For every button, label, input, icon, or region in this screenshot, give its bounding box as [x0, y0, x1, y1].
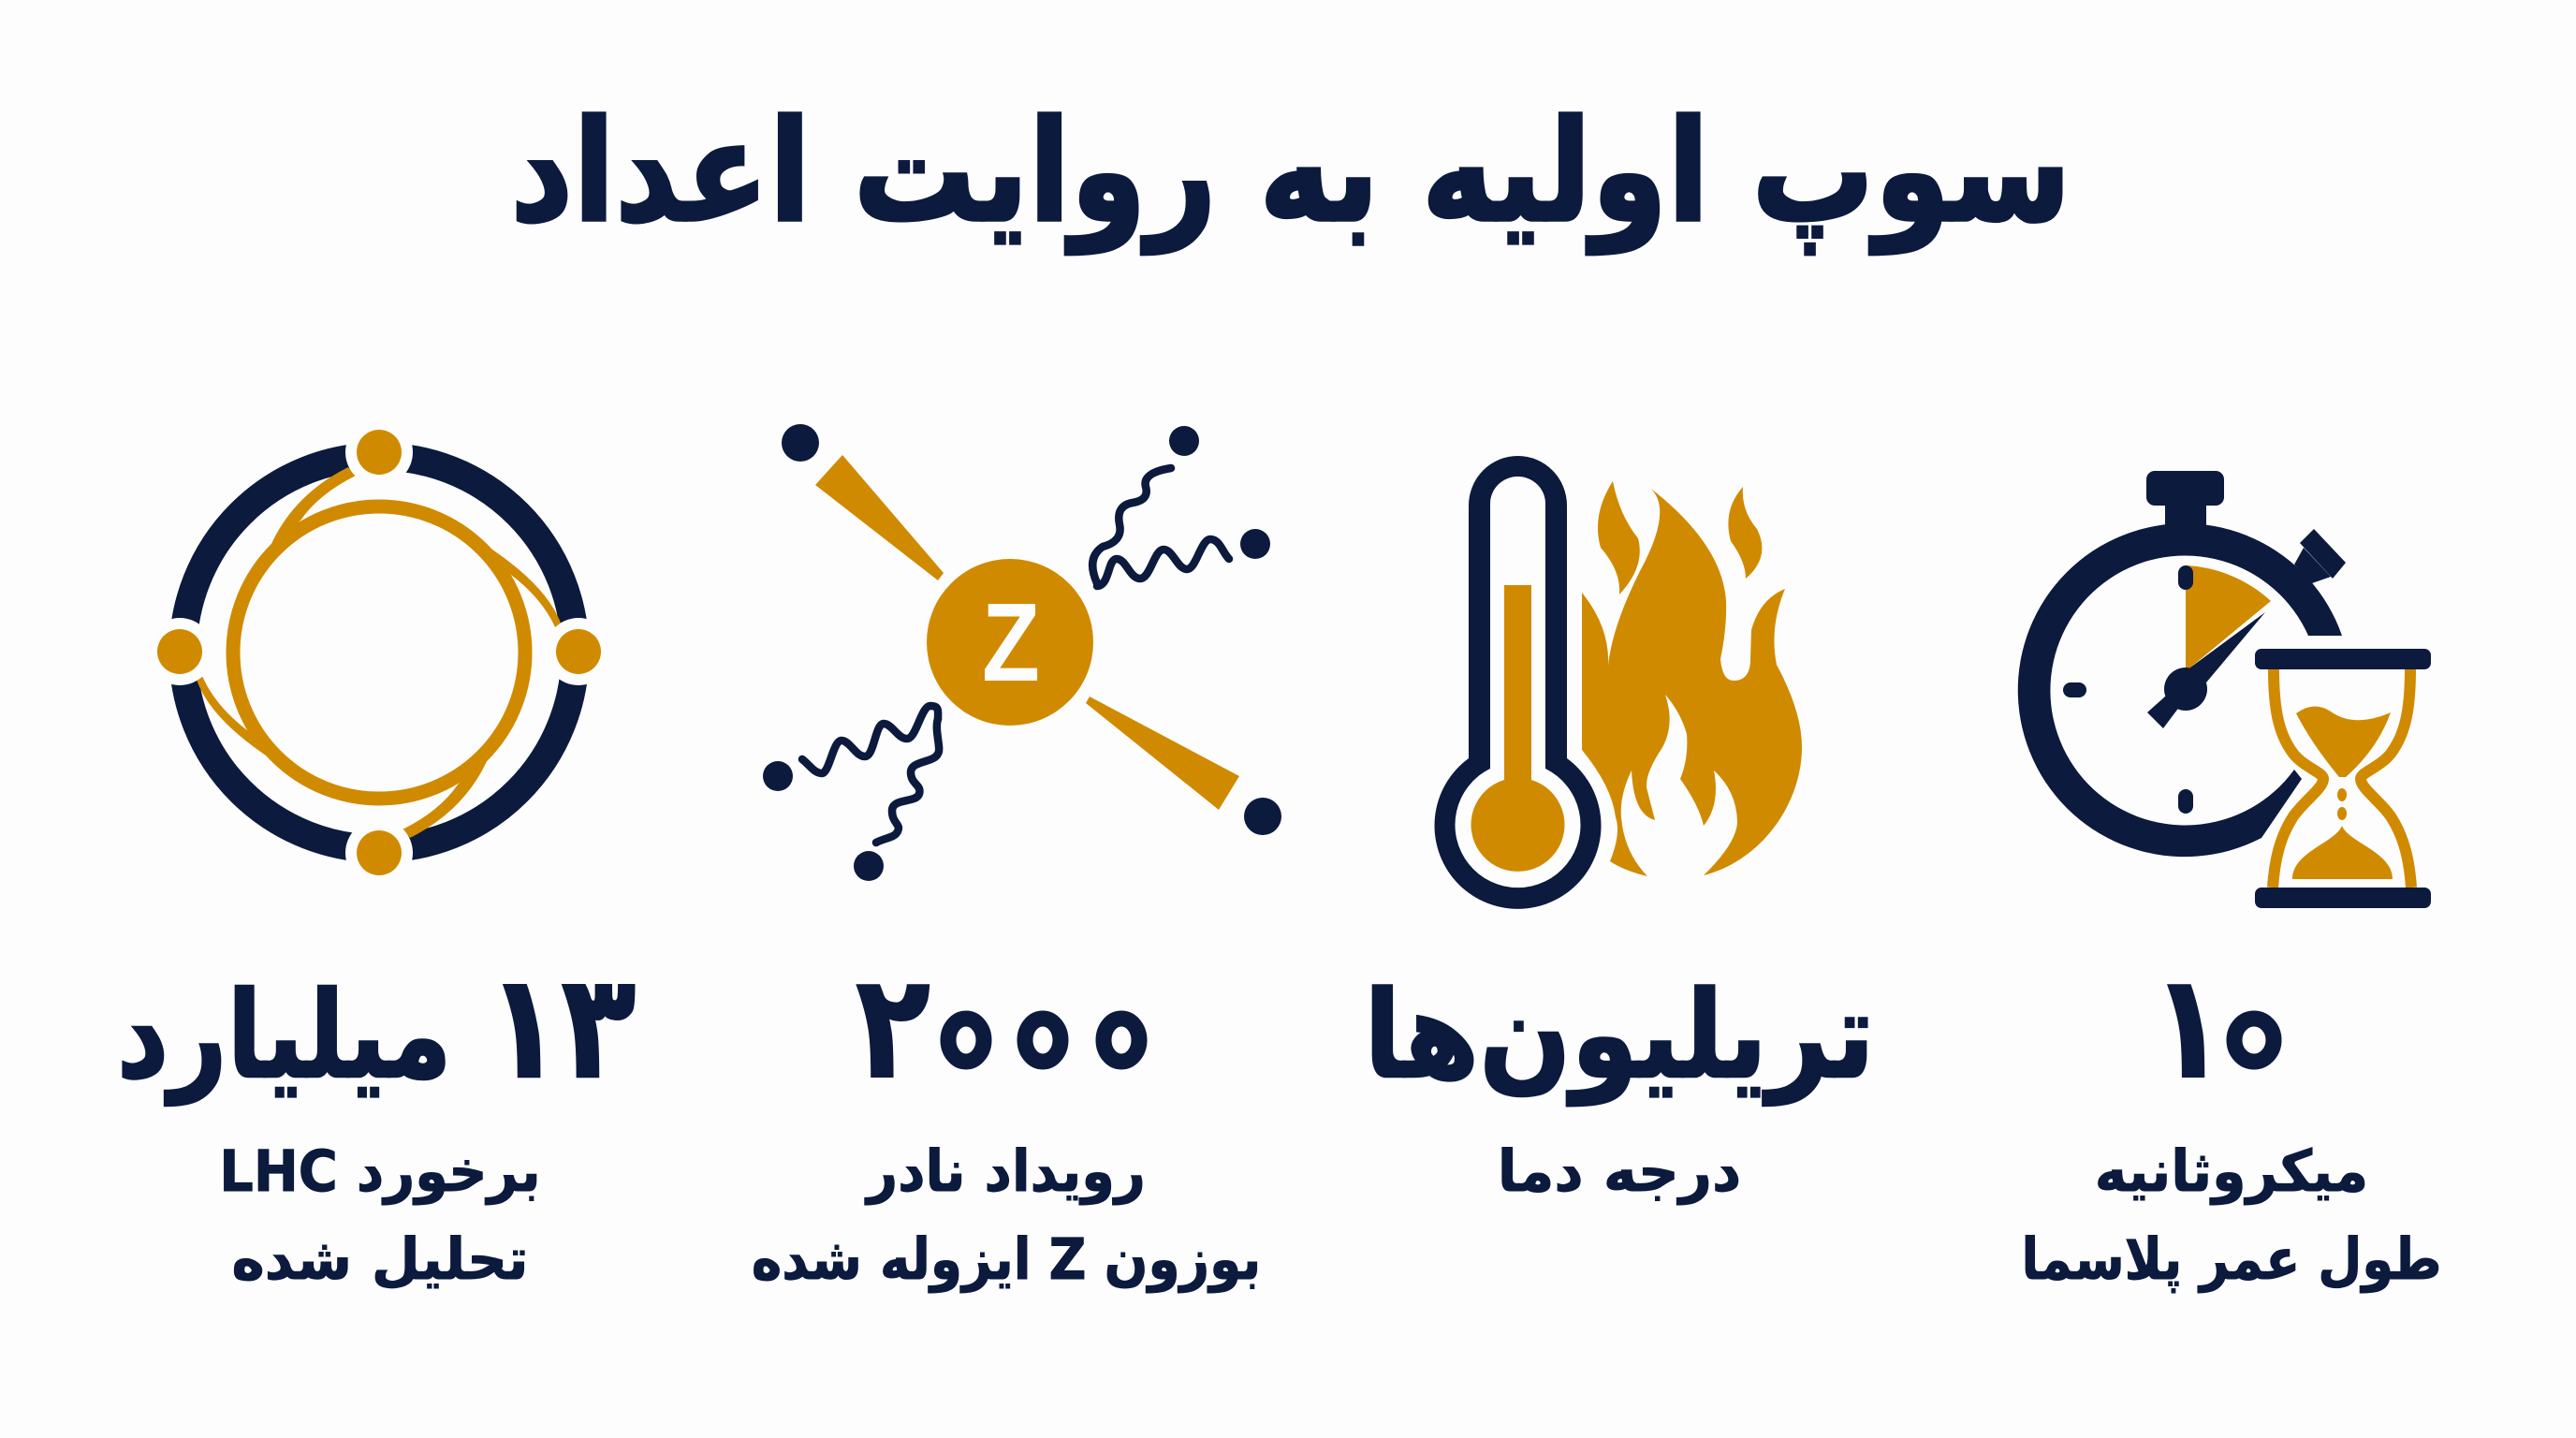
title: سوپ اولیه به روایت اعداد: [510, 91, 2071, 255]
label: LHC collisions analysed: برخورد LHC: [219, 1137, 541, 1205]
label: microseconds plasma lifetime: [2021, 1139, 2442, 1294]
label: microseconds plasma lifetime: میکروثانیه: [2095, 1139, 2368, 1205]
stat: 10: ۱۰: [2151, 943, 2301, 1111]
label: microseconds plasma lifetime: طول عمر پلاسما: [2021, 1225, 2442, 1294]
label: LHC collisions analysed: تحلیل شده: [231, 1226, 529, 1293]
icon: Z boson decay: [763, 424, 1281, 881]
icon: collider ring: [146, 418, 612, 887]
label: rare isolated Z boson events: [752, 1137, 1261, 1294]
panel: Z boson events: [752, 424, 1281, 1294]
panel: plasma lifetime: [2018, 471, 2442, 1294]
stat: trillions: تریلیون‌ها: [1364, 965, 1875, 1107]
icon: Z boson decay: Z: [982, 580, 1040, 705]
label: LHC collisions analysed: [219, 1137, 541, 1293]
label: rare isolated Z boson events: بوزون Z ایزوله شده: [752, 1225, 1261, 1294]
panel: LHC collisions: [117, 418, 636, 1293]
icon: stopwatch and hourglass: [2018, 471, 2431, 908]
label: degrees of temperature: درجه دما: [1498, 1138, 1741, 1205]
stat: 2000: ۲۰۰۰: [856, 943, 1155, 1111]
label: rare isolated Z boson events: رویداد نادر: [864, 1137, 1146, 1205]
icon: thermometer and flames: [1434, 456, 1802, 909]
panel: temperature: [1364, 456, 1875, 1205]
stat: 13 billion: ۱۳ میلیارد: [117, 943, 636, 1111]
